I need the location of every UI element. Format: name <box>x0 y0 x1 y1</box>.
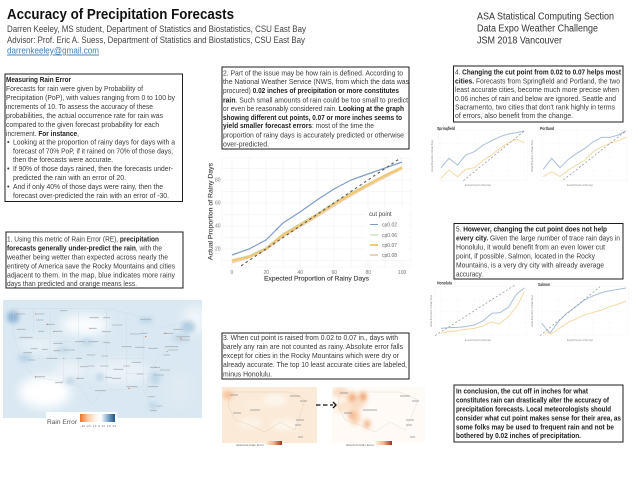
axis labels: 40 <box>298 270 303 276</box>
chart: Portland <box>530 126 628 187</box>
panel: measuring rain error: increment. For instance, <box>6 129 79 138</box>
panel: conclusion: bothered by 0.02 inches of precipitation. <box>456 431 581 440</box>
axis labels: 40 <box>215 224 221 230</box>
conference information <box>477 12 614 46</box>
panel: finding 2 text: yield smaller forecast errors: most of the time the <box>223 121 374 130</box>
panel: finding 1 text: days than predicted and orange means less. <box>7 279 137 288</box>
axis labels: 80 <box>366 270 371 276</box>
map: rain error across the US <box>3 300 207 428</box>
line: cp0.07 <box>232 168 402 260</box>
arrow between maps <box>316 402 336 408</box>
panel: finding 2 text: over-predicted. <box>223 140 269 148</box>
city labels <box>17 311 190 411</box>
panel: finding 2 text: rain. Such small amounts of rain could be too small to predict <box>223 95 408 104</box>
conference information: Data Expo Weather Challenge <box>477 24 598 34</box>
chart: Springfield: Expected Proportion of Rainy Days <box>465 183 491 187</box>
line: ideal diagonal <box>240 158 402 266</box>
line: cp0.06 <box>232 167 402 260</box>
line: cp0.08 <box>232 168 402 262</box>
panel: measuring rain error: then the forecasts were accurate. <box>13 155 113 164</box>
panel: measuring rain error: forecast of 70% PoP, if it rained on 70% of those days, <box>13 146 173 156</box>
panel: measuring rain error: predicted the rain with an error of 20. <box>13 173 126 182</box>
panel: measuring rain error: • <box>7 164 10 173</box>
chart: actual vs expected proportion of rainy days <box>208 157 411 282</box>
panel: measuring rain error: probabilities, the actual occurrence rate for rain was <box>6 111 163 120</box>
panel: finding 2 text: showing different cut points, 0.07 or more inches seems to <box>223 113 402 122</box>
panel: measuring rain error: Measuring Rain Error <box>6 75 71 84</box>
panel: measuring rain error: Forecasts for rain were given by Probability of <box>6 84 144 93</box>
panel: measuring rain error: forecast over-predicted the rain with an error of -30. <box>13 191 169 200</box>
axis labels: 80 <box>215 178 221 184</box>
chart: Honolulu: Expected Proportion of Rainy Days <box>465 338 491 342</box>
state borders <box>13 308 192 412</box>
authors and contact: darrenkeeley@gmail.com <box>7 46 99 56</box>
map legend: rain error: Rain Error <box>47 419 78 426</box>
panel: finding 5 text: point, if possible. Salmon, located in the Rocky <box>456 252 595 260</box>
panel: finding 4 text: of errors, also benefit from the change. <box>455 111 573 120</box>
chart: Salmon: Salmon <box>538 282 550 287</box>
chart: Springfield <box>430 126 527 187</box>
chart: Honolulu <box>429 280 527 342</box>
map: absolute error at cut point 0.02 <box>222 387 317 447</box>
panel: finding 3 text: minus Honolulu. <box>223 370 272 378</box>
panel: finding 1 text: adjacent to them. In the map, blue indicates more rainy <box>7 270 175 280</box>
panel: finding 2 text <box>222 67 409 149</box>
axis labels: 60 <box>332 270 337 276</box>
panel: finding 4 text: cities. Forecasts from Springfield and Portland, the two <box>455 76 620 86</box>
panel: finding 3 text: already accurate. The top 10 least accurate cities are labeled, <box>223 360 407 369</box>
panel: finding 4 text <box>454 66 623 122</box>
panel: finding 5 text: Mountains, is a very dry city with already average <box>456 260 604 270</box>
panel: finding 5 text: every city. Given the large number of trace rain days in <box>456 234 620 242</box>
chart: Portland: Portland <box>540 126 554 131</box>
chart: Portland: Actual Proportion of Rainy Days <box>530 139 534 172</box>
panel: measuring rain error: Looking at the proportion of rainy days for days with a <box>13 138 176 146</box>
chart: Springfield: Springfield <box>437 126 455 131</box>
panel: finding 5 text: 5. However, changing the cut point does not help <box>456 224 607 234</box>
map legend: absolute rain error: Absolute Rain Error <box>236 443 264 447</box>
panel: finding 5 text: accuracy. <box>456 270 483 278</box>
panel: conclusion: constitutes rain can drastically alter the accuracy of <box>456 396 609 404</box>
axis labels: 60 <box>215 200 221 206</box>
panel: finding 5 text <box>454 224 623 279</box>
chart: Salmon: Actual Proportion of Rainy Days <box>530 294 534 327</box>
panel: finding 1 text: 1. Using this metric of Rain Error (RE), precipitation <box>7 234 159 244</box>
panel: measuring rain error: • <box>7 138 10 146</box>
panel: conclusion: In conclusion, the cut off in inches for what <box>456 386 588 396</box>
chart legend: cut point: cp0.06 <box>382 233 397 239</box>
panel: measuring rain error: compared to the given forecast probability for each <box>6 120 159 129</box>
axis labels: 20 <box>215 246 221 252</box>
panel: finding 1 text: weather being wetter than expected across nearly the <box>6 252 168 262</box>
panel: finding 3 text <box>222 333 409 379</box>
panel: finding 2 text: 2. Part of the issue may be how rain is defined. According to <box>223 68 403 77</box>
panel: finding 1 text <box>6 232 183 288</box>
chart: Salmon <box>530 282 628 342</box>
chart legend: cut point <box>366 208 406 260</box>
conference information: JSM 2018 Vancouver <box>477 36 563 46</box>
y axis title: Actual Proportion of Rainy Days <box>208 162 214 260</box>
chart: Honolulu: Honolulu <box>437 280 452 286</box>
line: cp0.02 <box>232 162 402 255</box>
chart legend: cut point: cp0.07 <box>382 243 397 249</box>
chart legend: cut point: cp0.02 <box>382 222 397 228</box>
chart legend: cut point: cp0.08 <box>382 253 397 259</box>
conference information: ASA Statistical Computing Section <box>477 12 614 22</box>
map legend: rain error <box>46 412 117 428</box>
panel: measuring rain error <box>5 74 182 202</box>
panel: finding 4 text: 0.06 inches of rain and below are ignored. Seattle and <box>455 94 616 103</box>
map: absolute error at cut point 0.07 <box>332 387 425 447</box>
axis labels: 0 <box>230 270 234 276</box>
axis labels <box>215 178 407 276</box>
panel: finding 5 text: Honolulu, it would benefit from an even lower cut <box>456 242 605 252</box>
panel: finding 4 text: least accurate cities, become much more precise when <box>455 85 619 94</box>
panel: finding 1 text: entirety of America save the Rocky Mountains and cities <box>7 262 175 270</box>
authors and contact <box>7 24 306 56</box>
panel: conclusion: some folks may be used to frequent rain and not be <box>456 422 614 432</box>
chart: Honolulu: Actual Proportion of Rainy Days <box>429 294 433 327</box>
panel: finding 2 text: procured) 0.02 inches of precipitation or more constitutes <box>223 86 399 95</box>
chart: Salmon: Expected Proportion of Rainy Days <box>567 338 593 342</box>
panel: finding 2 text: or even be reasonably considered rain. Looking at the graph <box>223 104 404 113</box>
panel: measuring rain error: increments of 10. To assess the accuracy of these <box>6 102 153 111</box>
panel: conclusion: precipitation forecasts. Local meteorologists should <box>456 404 611 414</box>
panel: finding 2 text: proportion of rainy days is accurately predicted or otherwise <box>223 130 404 140</box>
panel: finding 3 text: except for cities in the Rocky Mountains which were dry or <box>223 351 399 360</box>
panel: measuring rain error: Precipitation (PoP), with values ranging from 0 to 100 by <box>6 93 175 102</box>
chart legend: cut point: cut point <box>369 212 392 218</box>
axis labels: 20 <box>264 270 269 276</box>
map legend: rain error: -30-20-10 0 10 20 30 <box>80 424 116 428</box>
panel: measuring rain error: If 90% of those days rained, then the forecasts under- <box>13 164 173 173</box>
chart: Portland: Expected Proportion of Rainy Days <box>567 183 593 187</box>
panel: measuring rain error: • <box>7 182 10 191</box>
panel: finding 3 text: barely any rain are not counted as rainy. Absolute error falls <box>223 342 403 351</box>
chart: Springfield: Actual Proportion of Rainy Days <box>430 139 434 172</box>
panel: finding 1 text: forecasts generally under-predict the rain, with the <box>7 244 162 252</box>
axis labels: 100 <box>398 270 407 276</box>
title: Accuracy of Precipitation Forecasts <box>7 6 234 23</box>
authors and contact: Advisor: Prof. Eric A. Suess, Department of Statistics and Biostatistics, CSU East Bay <box>7 35 305 46</box>
panel: finding 2 text: the National Weather Service (NWS, from which the data was <box>223 77 409 86</box>
panel: finding 3 text: 3. When cut point is raised from 0.02 to 0.07 in., days with <box>223 333 398 342</box>
panel: measuring rain error: And if only 40% of those days were rainy, then the <box>13 182 163 191</box>
authors and contact: Darren Keeley, MS student, Department of Statistics and Biostatistics, CSU East Bay <box>7 24 306 35</box>
panel: conclusion <box>454 385 623 442</box>
panel: finding 4 text: Sacramento, two cities that don't rank highly in terms <box>455 102 615 112</box>
x axis title: Expected Proportion of Rainy Days <box>264 276 370 282</box>
map legend: absolute rain error: Absolute Rain Error <box>346 443 374 447</box>
